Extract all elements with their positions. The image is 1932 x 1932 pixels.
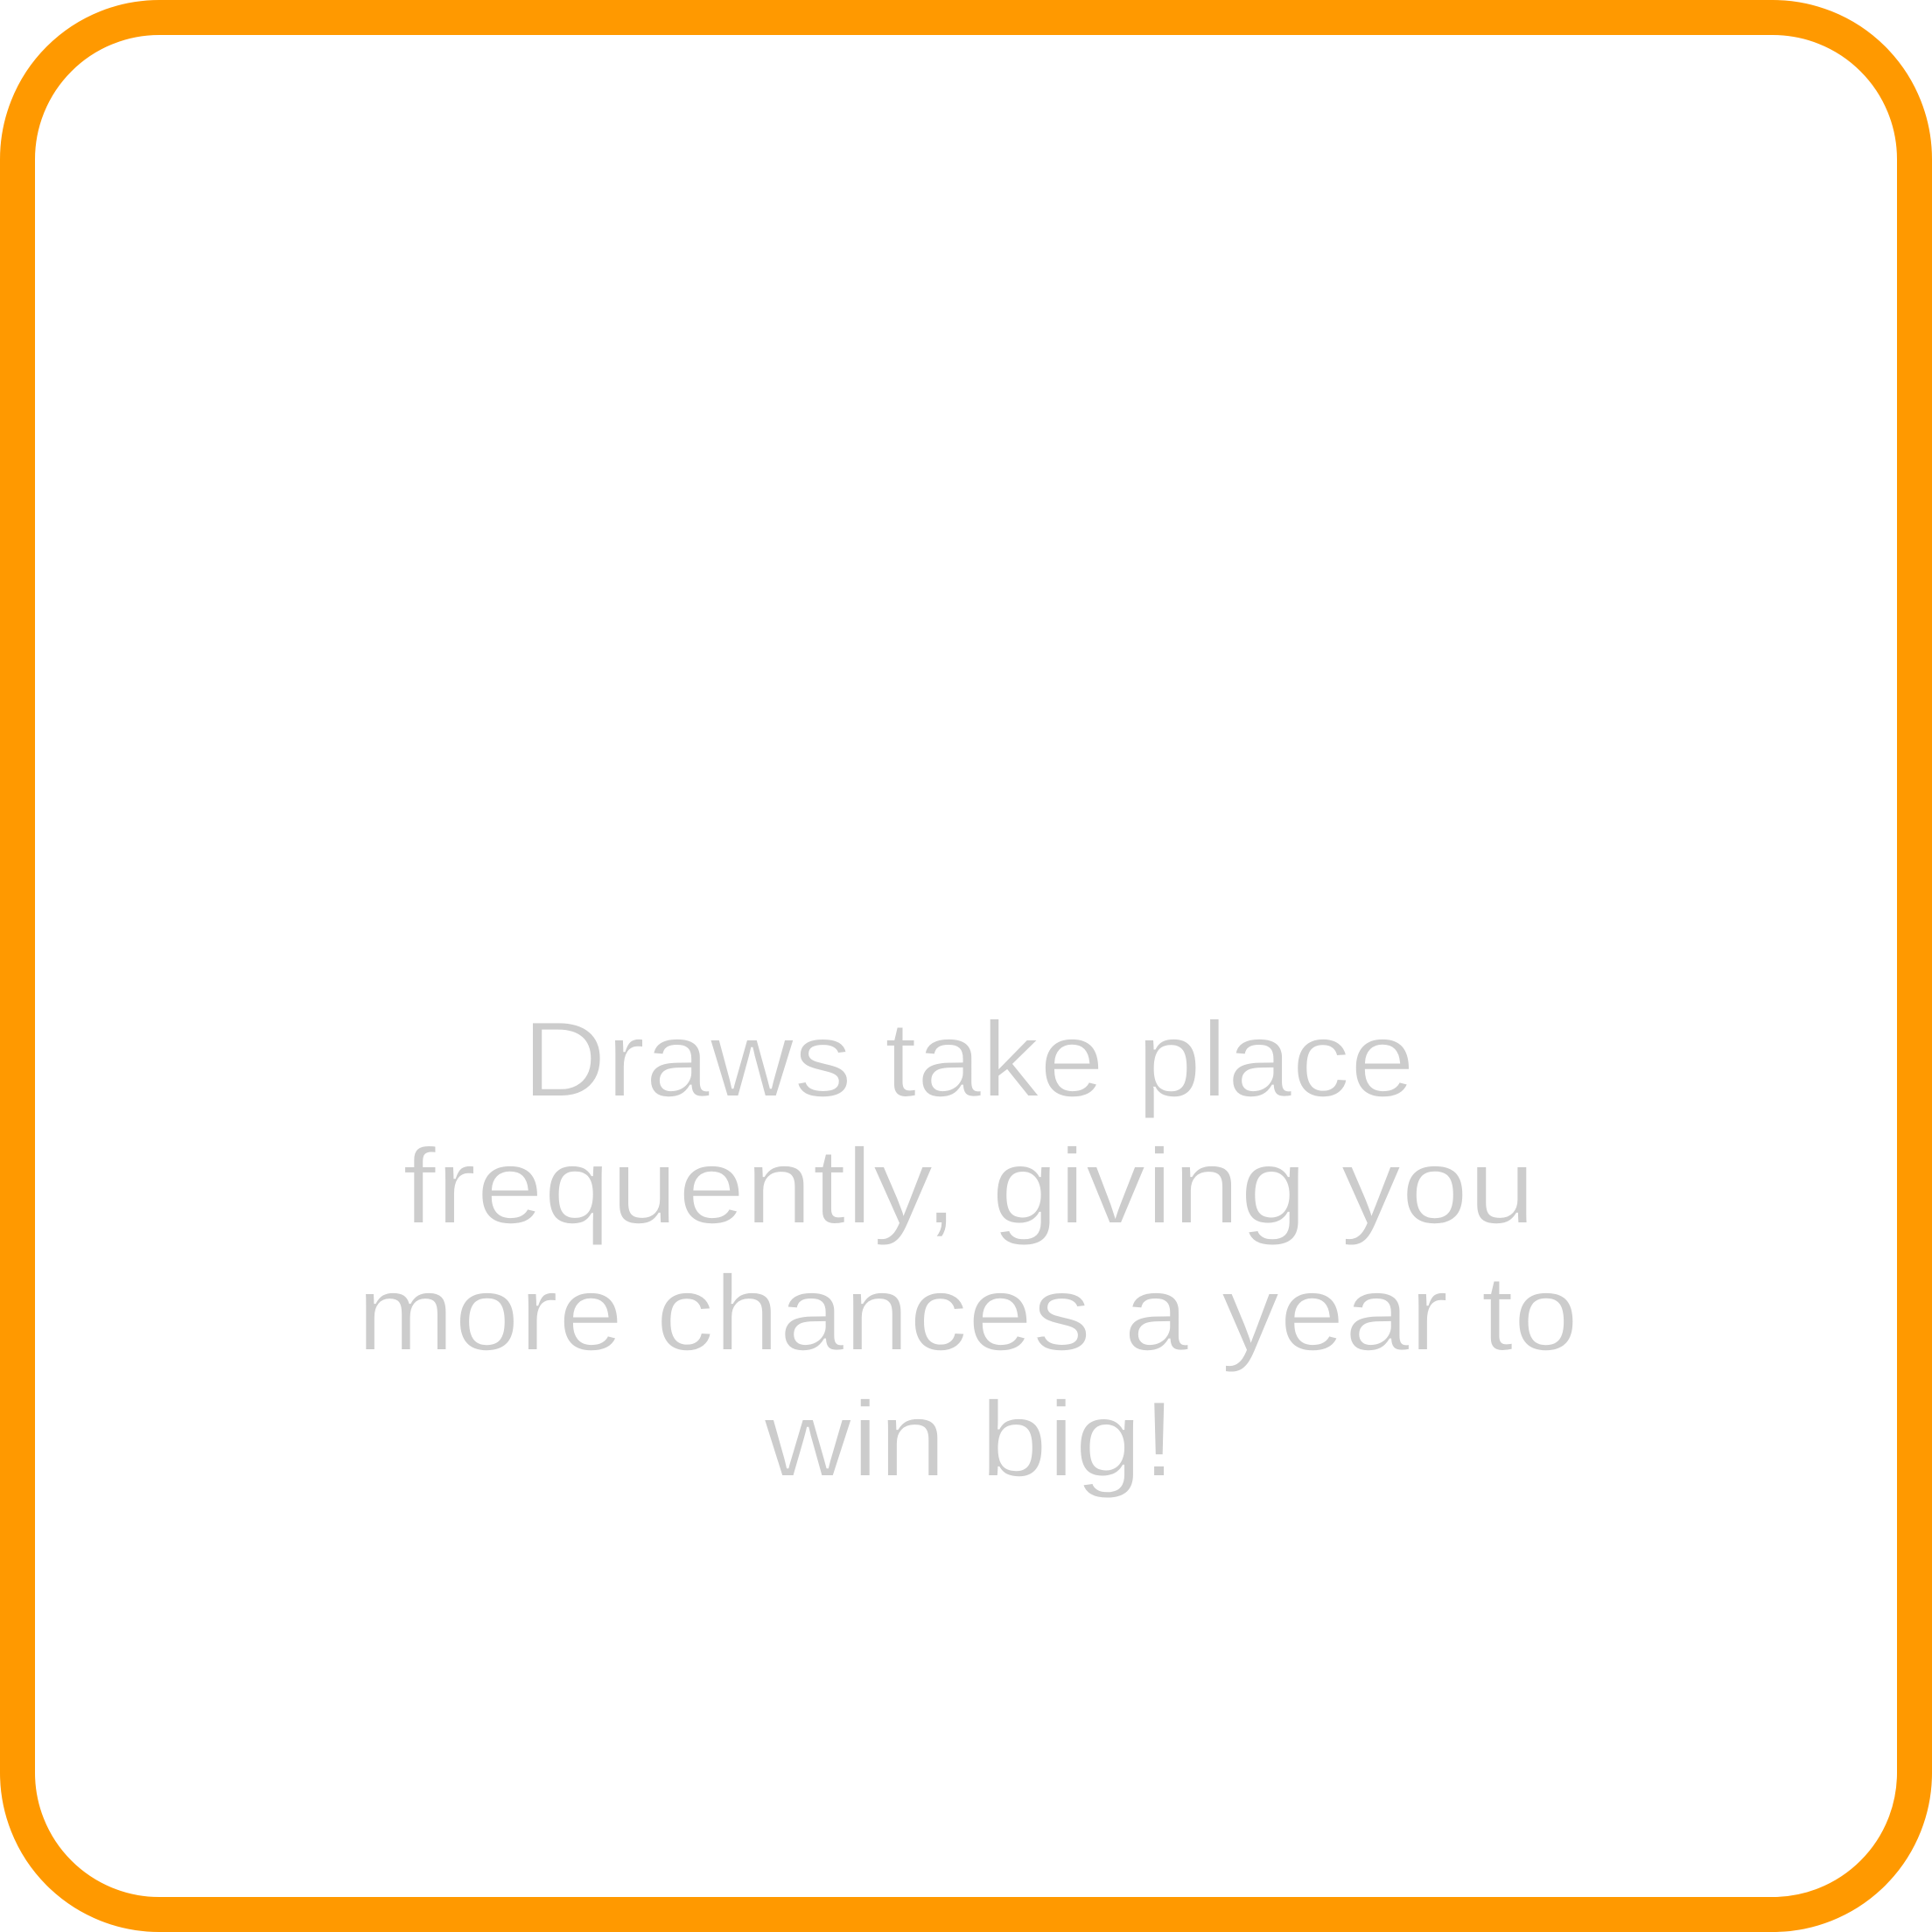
body text: win big! bbox=[763, 1380, 1176, 1500]
body text bbox=[357, 1000, 1578, 1500]
body text: frequently, giving you bbox=[402, 1127, 1536, 1247]
body text: more chances a year to bbox=[357, 1254, 1578, 1374]
body text: Draws take place bbox=[522, 1000, 1415, 1120]
